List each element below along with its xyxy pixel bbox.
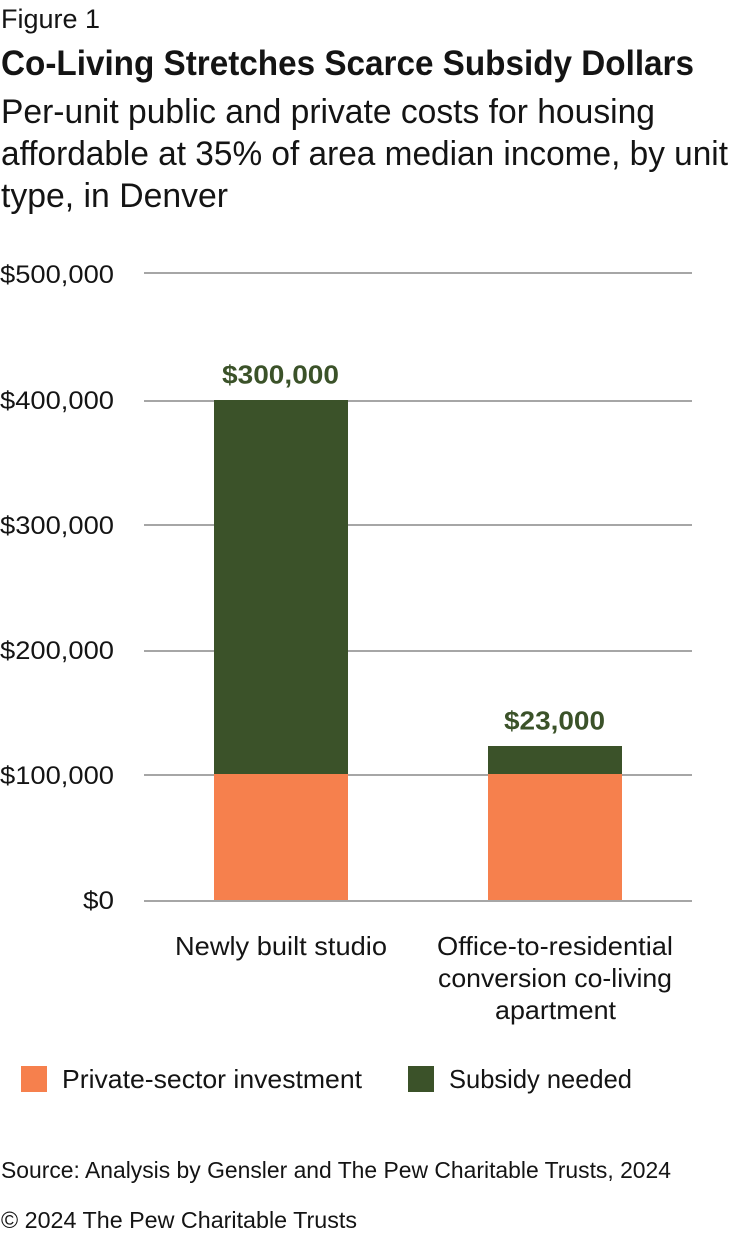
legend: private-sector investment: Private-sector investment — [62, 1064, 363, 1094]
source: Source: Analysis by Gensler and The Pew Charitable Trusts, 2024 — [1, 1157, 671, 1183]
legend: subsidy needed: Subsidy needed — [449, 1064, 632, 1094]
y axis labels: $0 — [83, 887, 114, 915]
category label: co-living — [437, 931, 673, 1025]
copyright: © 2024 The Pew Charitable Trusts — [1, 1207, 357, 1233]
y axis labels: $300,000 — [0, 512, 114, 540]
legend — [21, 1064, 632, 1094]
value label: co-living subsidy: $23,000 — [504, 706, 605, 736]
title: Co-Living Stretches Scarce Subsidy Dollars — [1, 44, 694, 83]
category label: studio: Newly built studio — [175, 931, 387, 961]
figure label: Figure 1 — [1, 4, 100, 34]
bar chart — [0, 261, 692, 1025]
subtitle: Per-unit public and private costs for housing — [1, 93, 655, 131]
y axis labels: $100,000 — [0, 762, 114, 790]
category label: co-living: conversion co-living — [438, 963, 672, 993]
y axis labels: $500,000 — [0, 261, 114, 289]
y axis labels: $200,000 — [0, 637, 114, 665]
bar: co-living apartment — [488, 746, 622, 900]
value label: studio subsidy: $300,000 — [222, 360, 339, 390]
subtitle — [1, 93, 729, 215]
category label: co-living: apartment — [495, 995, 617, 1025]
subtitle: type, in Denver — [1, 177, 228, 215]
subtitle: affordable at 35% of area median income, by unit — [1, 135, 729, 173]
y axis labels: $400,000 — [0, 387, 114, 415]
y axis labels — [0, 261, 114, 915]
bar: newly built studio — [214, 400, 348, 900]
category label: co-living: Office-to-residential — [437, 931, 673, 961]
